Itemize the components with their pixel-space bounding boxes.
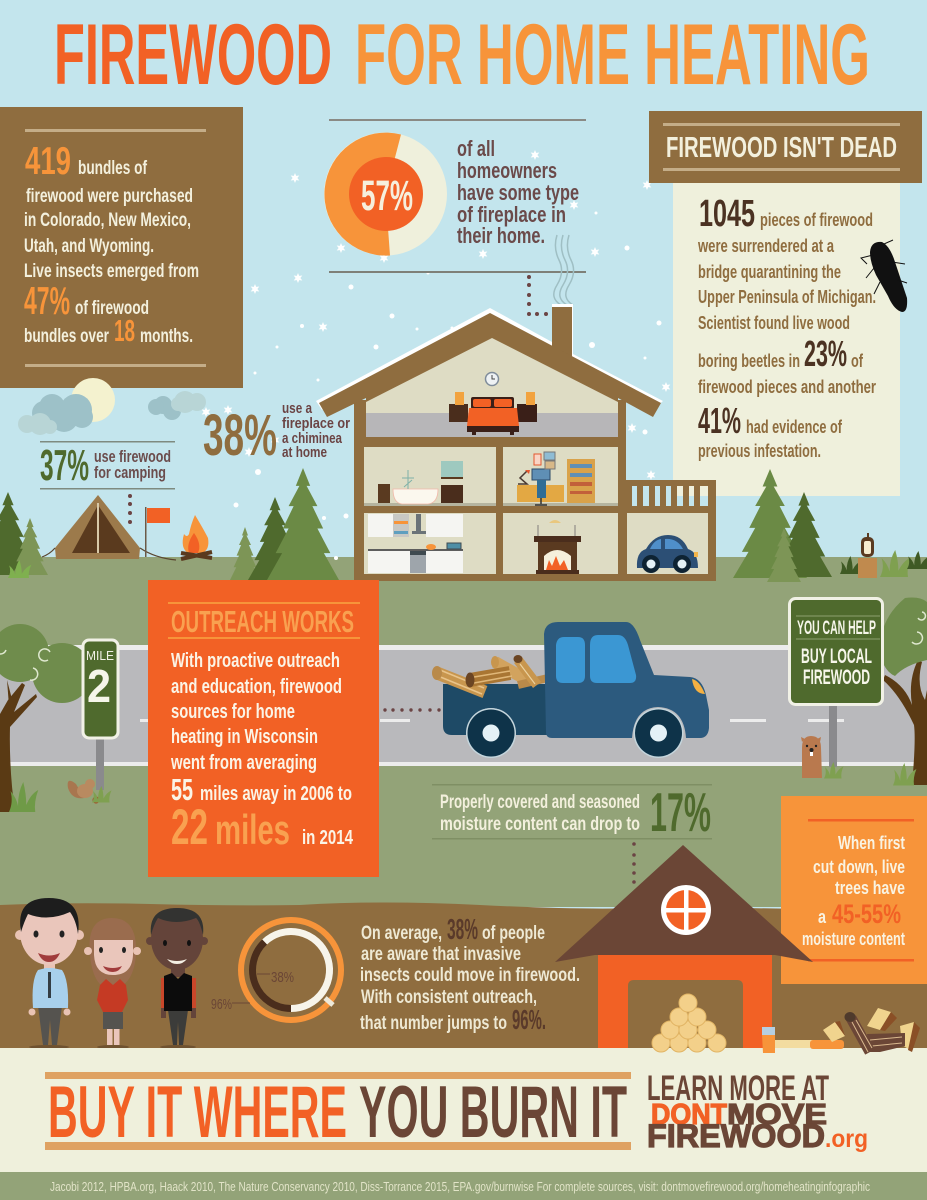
- panel: outreach works: in 2014: [302, 827, 354, 849]
- panel: 57% homeowners: of all: [457, 136, 495, 161]
- ring chart: 38% to 96% awareness: [211, 920, 341, 1020]
- dotted connector: truck: [383, 708, 441, 712]
- sky background: [0, 0, 927, 560]
- icon: mile marker sign: 2: [87, 660, 111, 712]
- snowfall: [202, 150, 713, 560]
- text: awareness: 96%.: [512, 1004, 546, 1035]
- stat: 38% fireplace: fireplace or: [282, 415, 350, 432]
- panel: 57% homeowners: have some type: [457, 180, 579, 205]
- roof: [319, 313, 661, 417]
- icon: grass at mile post: [92, 786, 112, 802]
- text: awareness: are aware that invasive: [361, 944, 521, 965]
- chimney: [552, 307, 572, 367]
- icon: clock: [486, 372, 498, 386]
- panel: firewood isn't dead: previous infestation.: [698, 441, 821, 461]
- panel: outreach works: miles away in 2006 to: [200, 783, 352, 805]
- logo: learn more at dontmovefirewood.org: LEARN MORE AT: [647, 1069, 829, 1108]
- panel: insect bundles: bundles over: [24, 326, 109, 347]
- panel: insect bundles: [0, 107, 243, 388]
- panel: firewood isn't dead: [649, 111, 922, 496]
- icon: flag: [145, 507, 170, 557]
- house: [316, 304, 716, 581]
- stat: 17% seasoned moisture: 17%: [650, 781, 711, 843]
- chimney smoke: [554, 235, 574, 305]
- panel: outreach works: miles: [215, 806, 290, 853]
- donut chart: 57%: 57%: [361, 172, 413, 220]
- panel: insect bundles: Live insects emerged from: [24, 261, 199, 282]
- panel: firewood isn't dead: 1045: [699, 193, 755, 235]
- panel: live tree moisture: [781, 796, 927, 984]
- panel: insect bundles: 18: [114, 313, 135, 348]
- logo: learn more at dontmovefirewood.org: FIREWOOD: [647, 1118, 825, 1154]
- logo: learn more at dontmovefirewood.org: [647, 1069, 868, 1154]
- panel: insect bundles: Utah, and Wyoming.: [24, 236, 154, 257]
- panel: firewood isn't dead: 23%: [804, 333, 847, 374]
- panel: insect bundles: in Colorado, New Mexico,: [24, 210, 191, 231]
- panel: insect bundles: bundles of: [78, 158, 147, 179]
- camp scene: [42, 494, 212, 560]
- text: awareness: [360, 914, 580, 1035]
- stat: 17% seasoned moisture: [432, 781, 712, 843]
- icon: grass right of road: [893, 763, 916, 786]
- icon: tent: [42, 495, 176, 560]
- panel: firewood isn't dead: boring beetles in: [698, 351, 800, 371]
- person: woman in red blouse: [84, 918, 141, 1049]
- grass, lantern and stump: [840, 533, 927, 578]
- panel: outreach works: sources for home: [171, 701, 295, 723]
- icon: squirrel: [68, 779, 100, 804]
- panel: firewood isn't dead: of: [851, 351, 864, 371]
- icon: you can help sign: BUY LOCAL: [801, 645, 872, 668]
- panel: outreach works: 55: [171, 772, 193, 807]
- panel: 57% homeowners: homeowners: [457, 158, 557, 183]
- panel: insect bundles: firewood were purchased: [26, 186, 193, 207]
- sun and clouds: [18, 378, 206, 435]
- person: man in blue shirt: [15, 898, 84, 1049]
- logo: learn more at dontmovefirewood.org: .org: [825, 1125, 868, 1153]
- panel: 57% homeowners: their home.: [457, 223, 545, 248]
- icon: mile marker sign: MILE: [86, 648, 114, 663]
- panel: outreach works: OUTREACH WORKS: [171, 604, 354, 639]
- icon: campfire: [181, 515, 212, 559]
- kitchen: [368, 514, 463, 573]
- text: awareness: 38%: [447, 914, 478, 946]
- title: FIREWOOD: [54, 7, 332, 103]
- dotted connector: shed: [632, 842, 636, 884]
- icon: mile marker sign: [83, 640, 118, 790]
- logo: learn more at dontmovefirewood.org: DONT: [651, 1099, 727, 1131]
- icon: lantern: [861, 533, 874, 557]
- stat: 37% camping: use firewood: [94, 447, 171, 466]
- text: awareness: of people: [482, 923, 545, 944]
- stat: 37% camping: 37%: [40, 441, 89, 490]
- icon: grass at sign post: [824, 762, 844, 778]
- ring chart: 38% to 96% awareness: 96%: [211, 996, 232, 1013]
- panel: outreach works: 22: [171, 799, 208, 855]
- right pine trees: [733, 469, 832, 582]
- icon: you can help sign: FIREWOOD: [803, 666, 870, 689]
- text: awareness: that number jumps to: [360, 1013, 507, 1034]
- panel: outreach works: With proactive outreach: [171, 650, 340, 672]
- stat: 17% seasoned moisture: moisture content can drop to: [440, 814, 640, 835]
- office: [517, 452, 595, 505]
- banner: buy it where you burn it: YOU BURN IT: [359, 1072, 627, 1153]
- banner: buy it where you burn it: BUY IT WHERE: [48, 1072, 347, 1153]
- dotted connector: chimney to text: [527, 275, 548, 316]
- text: awareness: With consistent outreach,: [361, 987, 537, 1008]
- panel: insect bundles: of firewood: [75, 298, 149, 319]
- snow on roof: [316, 304, 663, 410]
- deck railing: [626, 480, 716, 510]
- text: awareness: On average,: [361, 923, 442, 944]
- panel: live tree moisture: a: [818, 907, 827, 927]
- text: awareness: insects could move in firewood.: [360, 965, 580, 986]
- icon: you can help sign: [790, 598, 882, 767]
- stat: 37% camping: [40, 441, 175, 490]
- icon: woodshed: [555, 845, 813, 1050]
- icon: fireplace: [534, 520, 581, 574]
- dotted connector: tent: [128, 494, 132, 524]
- person: man in black vest: [146, 908, 208, 1049]
- stat: 38% fireplace: 38%: [203, 403, 277, 468]
- panel: outreach works: went from averaging: [170, 752, 317, 774]
- stat: 38% fireplace: at home: [282, 444, 327, 461]
- icon: stacked logs: [652, 994, 726, 1052]
- panel: outreach works: and education, firewood: [171, 676, 342, 698]
- icon: grass left road: [9, 782, 38, 812]
- panel: outreach works: heating in Wisconsin: [171, 726, 318, 748]
- right tree: [880, 598, 927, 785]
- rooms: [364, 447, 708, 574]
- icon: groundhog: [801, 736, 822, 778]
- left tree: [0, 624, 92, 812]
- icon: grass tuft left: [8, 560, 31, 578]
- panel: live tree moisture: trees have: [835, 878, 905, 898]
- icon: bed: [449, 392, 537, 435]
- icon: axe: [762, 1027, 844, 1053]
- stat: 17% seasoned moisture: Properly covered and seasoned: [440, 792, 640, 813]
- bathroom: [378, 461, 463, 504]
- panel: firewood isn't dead: 41%: [698, 400, 741, 441]
- title: [54, 7, 870, 103]
- icon: firewood pile: [823, 1008, 920, 1052]
- icon: car: [637, 535, 698, 573]
- icon: pickup truck with firewood: [432, 622, 709, 758]
- icon: beetle: [861, 240, 907, 312]
- house walls: [354, 400, 716, 581]
- firewood load: [432, 655, 548, 694]
- panel: firewood isn't dead: had evidence of: [746, 417, 843, 437]
- attic room: [366, 338, 618, 437]
- panel: firewood isn't dead: were surrendered at a: [697, 236, 835, 256]
- logo: learn more at dontmovefirewood.org: MOVE: [727, 1099, 827, 1131]
- ring chart: 38% to 96% awareness: 38%: [271, 969, 294, 986]
- stat: 37% camping: for camping: [94, 463, 166, 482]
- stat: 38% fireplace: a chiminea: [282, 430, 342, 447]
- panel: firewood isn't dead: bridge quarantining the: [698, 262, 841, 282]
- footer band: [0, 1048, 927, 1172]
- panel: 57% homeowners: [324, 119, 586, 273]
- panel: live tree moisture: 45-55%: [832, 899, 901, 929]
- panel: 57% homeowners: of fireplace in: [457, 202, 566, 227]
- panel: live tree moisture: When first: [838, 833, 905, 853]
- sources footer: [0, 1172, 927, 1200]
- panel: firewood isn't dead: pieces of firewood: [760, 210, 873, 230]
- icon: shed window: [664, 888, 708, 932]
- panel: insect bundles: 47%: [24, 280, 70, 323]
- stat: 38% fireplace: use a: [282, 400, 313, 417]
- panel: outreach works: [148, 580, 379, 877]
- icon: people: [15, 898, 208, 1049]
- left pine trees: [0, 468, 339, 580]
- ground and road: [0, 557, 927, 1050]
- icon: stump: [858, 558, 877, 578]
- panel: insect bundles: months.: [140, 326, 193, 347]
- panel: firewood isn't dead: Scientist found live wood: [698, 313, 850, 333]
- donut chart: 57%: [324, 132, 447, 256]
- panel: insect bundles: 419: [25, 140, 71, 183]
